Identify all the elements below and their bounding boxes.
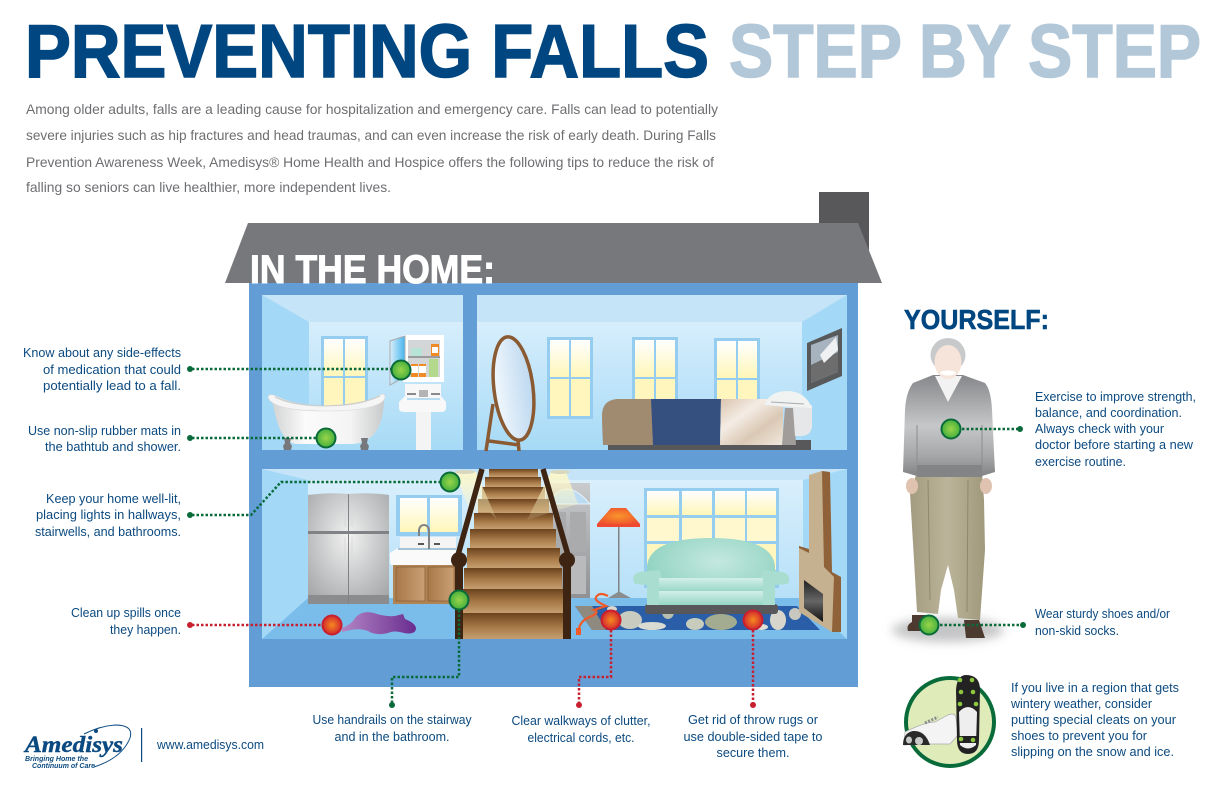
callout: exercise: doctor before starting a new [1035,437,1194,452]
handrails [451,469,575,639]
callout: lighting: stairwells, and bathrooms. [35,524,181,539]
callout: exercise: balance, and coordination. [1035,405,1182,420]
callout: handrails [312,590,472,744]
floor lamp [597,508,640,598]
logo: Amedisys: Amedisys [23,732,123,757]
callout: clutter: Clear walkways of clutter, [512,713,650,728]
callout: exercise: Exercise to improve strength, [1035,389,1196,404]
hands [906,478,918,494]
callout: medication: of medication that could [43,362,181,377]
kitchen sink and cabinets [390,525,456,604]
callout: handrails: Use handrails on the stairway [312,712,472,727]
title [25,9,1201,93]
pedestal sink [399,384,446,450]
callout: medication: Know about any side-effects [23,345,181,360]
shadow [892,618,1004,642]
chimney [819,192,869,256]
callout: shoes [920,606,1171,638]
callout: shoes: non-skid socks. [1035,623,1119,638]
shoes [908,615,928,631]
panel: bedroom [463,295,847,451]
bathroom window [321,336,368,408]
callout: clutter: electrical cords, etc. [528,730,634,745]
intro text block: Prevention Awareness Week, Amedisys® Home Health and Hospice offers the following tips to reduce the risk of [26,154,714,170]
callout: cleats [1010,680,1179,759]
callout: cleats: If you live in a region that gets [1011,680,1179,695]
callout: exercise [942,389,1196,469]
mustache [940,370,956,376]
doorway behind stairs [546,483,590,598]
sofa [633,538,789,614]
trousers [910,472,985,620]
rug [575,605,820,630]
callout: cleats: shoes to prevent you for [1011,728,1148,743]
callout: cleats: putting special cleats on your [1011,712,1177,727]
staircase [451,469,578,639]
website: www.amedisys.com [156,737,264,752]
panel: house [225,192,882,687]
hair [930,338,966,372]
sweater [903,375,995,477]
callout: medication: potentially lead to a fall. [43,378,181,393]
callout: cleats: wintery weather, consider [1010,696,1153,711]
logo: Amedisys: Continuum of Care [32,761,95,770]
callout: exercise: Always check with your [1035,421,1165,436]
heading: yourself: YOURSELF: [904,304,1049,335]
spill [342,612,416,634]
callout: spills [71,605,342,637]
kitchen window [396,495,462,536]
panel: downstairs [262,469,847,639]
fireplace [799,471,841,632]
icon: shoe cleats [903,675,994,766]
heading: in the home: IN THE HOME: [250,248,495,292]
divider [141,728,142,762]
roof [225,223,882,283]
refrigerator [308,493,389,604]
callout: throw rugs: secure them. [716,745,790,760]
callout: rubber mats: the bathtub and shower. [45,439,181,454]
living room window [644,488,779,588]
callout: lighting: Keep your home well-lit, [46,491,181,506]
callout: throw rugs: use double-sided tape to [684,729,822,744]
callout: rubber mats [28,423,336,454]
callout: exercise: exercise routine. [1035,454,1126,469]
title: PREVENTING FALLS [25,9,709,93]
bed [602,391,812,450]
bathtub [268,394,385,450]
callout: throw rugs: Get rid of throw rugs or [688,712,819,727]
callout: rubber mats: Use non-slip rubber mats in [28,423,181,438]
medicine cabinet [390,335,444,385]
callout: medication [23,345,410,393]
callout: shoes: Wear sturdy shoes and/or [1035,606,1171,621]
callout: spills: they happen. [110,622,181,637]
panel: bathroom [262,295,463,450]
callout: lighting [35,472,460,539]
intro text block [26,101,718,195]
mirror [486,335,539,451]
callout: clutter [512,610,650,745]
intro text block: severe injuries such as hip fractures and head traumas, and can even increase the risk of early death. During Falls [26,127,716,143]
callout: cleats: slipping on the snow and ice. [1011,744,1174,759]
illustration: older man [892,338,1004,642]
intro text block: falling so seniors can live healthier, more independent lives. [26,179,391,195]
stair lights [455,470,578,520]
bedroom windows [547,337,760,419]
picture frame [807,328,842,391]
shirt [935,376,962,402]
callout: lighting: placing lights in hallways, [36,507,181,522]
callout: spills: Clean up spills once [71,605,181,620]
logo: Amedisys [23,725,131,770]
house body [249,283,858,687]
face [934,345,962,379]
callout: handrails: and in the bathroom. [334,729,450,744]
electrical cord [576,594,608,635]
intro text block: Among older adults, falls are a leading cause for hospitalization and emergency care. Falls can lead to potentially [26,101,718,117]
logo: Amedisys: Bringing Home the [25,754,88,763]
callout: throw rugs [684,610,822,760]
